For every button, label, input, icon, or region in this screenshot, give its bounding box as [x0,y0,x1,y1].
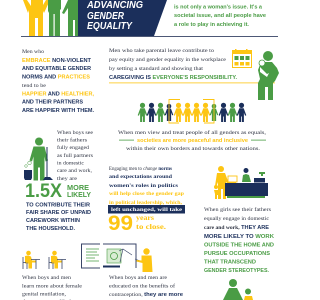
text block: fair share: TO CONTRIBUTE THEIR [26,202,90,208]
text block: boys see fathers: as full partners [57,152,93,159]
text block: girls see fathers: GENDER STEREOTYPES. [204,268,270,274]
text block: healthier men: AND EQUITABLE GENDER [22,66,91,72]
text block: parental leave: pay equity and gender equality in the workplace [109,57,227,63]
text block: healthier men: ARE HAPPIER WITH THEM. [22,108,95,114]
statistic: 99 years to close: years [136,214,154,222]
text block: girls see fathers: OUTSIDE THE HOME AND [204,242,274,248]
text block: healthier men: Men who [22,49,44,55]
text block: parental leave [109,48,275,83]
text block: boys see fathers [57,130,94,182]
text block: healthier men: NORMS AND PRACTICES [22,74,91,80]
text block: boys see fathers: in domestic [57,160,85,166]
text block: parental leave: Men who take parental leave contribute to [109,48,214,54]
text block: politics [109,166,184,206]
icon: father holding baby [258,51,279,100]
text block: contraception [109,275,183,300]
text block: contraception: contraception, they are more [109,292,183,298]
text block: girls see fathers: MORE LIKELY TO WORK [204,234,274,240]
icon: mother and child [223,279,253,300]
text block: fair share [26,202,91,232]
text block: societies: When men view and treat people of all genders as equals, [118,129,266,136]
text block: girls see fathers: PURSUE OCCUPATIONS [204,251,271,257]
text block: fair share: FAIR SHARE OF UNPAID [26,210,91,216]
text block: girls see fathers: equally engage in domestic [204,216,270,222]
people row with highlighted equal group [138,100,246,123]
text block: FGM: genital mutilation, [22,292,66,298]
icon: woman and child with shop counter [214,166,268,199]
text block: contraception: educated on the benefits of [109,282,175,290]
icon: father cleaning with mop [24,138,53,180]
title banner: EQUALITY [87,21,133,32]
callout: left unchanged [108,205,185,214]
statistic: 1.5X more likely: LIKELY [67,192,91,199]
icon: two students at desks [23,251,66,269]
text block: boys see fathers: they are [57,176,78,182]
text block: fair share: THE HOUSEHOLD. [26,226,76,232]
statistic: 99 years to close: to close. [136,223,166,231]
text block: societies: within their own borders and towards other nations. [126,146,260,152]
text block: FGM [22,275,83,300]
statistic: 99 years to close [108,212,166,235]
icon: teacher at whiteboard [82,244,152,272]
text block: boys see fathers: When boys see [57,130,94,136]
text block: societies: societies are more peaceful and inclusive [137,138,248,144]
statistic: 1.5X more likely: MORE [67,185,89,192]
text block: healthier men [22,49,95,114]
text block: politics: Engaging men to change norms [109,166,172,172]
text block: healthier men: tend to be [22,83,47,89]
intro statement: is not only a woman's issue. It's a [174,4,262,10]
title banner: GENDER [87,11,125,22]
text block: girls see fathers: When girls see their fathers [204,206,271,213]
text block: FGM: learn more about female [22,282,83,290]
intro statement [174,4,266,28]
text block: boys see fathers: fully engaged [57,144,89,151]
text block: politics: women's roles in politics [109,183,178,189]
text block: politics: will help close the gender gap [109,191,184,197]
text block: healthier men: AND THEIR PARTNERS [22,100,84,106]
text block: healthier men: EMBRACE NON-VIOLENT [22,58,92,64]
text block: girls see fathers: THAT TRANSCEND [204,260,256,266]
text block: politics: in political leadership, which, [109,200,183,206]
text block: politics: and expectations around [109,174,172,180]
intro statement: a role to play in achieving it. [174,22,250,28]
statistic: 99 years to close: 99 [108,212,133,235]
intro statement: societal issue, and all people have [174,13,266,19]
text block: boys see fathers: their fathers [57,136,87,144]
text block: contraception: When boys and men are [109,275,168,281]
title banner: ADVANCING [86,0,143,11]
text block: girls see fathers: care and work, THEY ARE [204,225,270,231]
statistic: 1.5X more likely: 1.5X [25,181,62,202]
text block: boys see fathers: care and work, [57,168,92,174]
statistic: 1.5X more likely [25,181,91,202]
text block: parental leave: CAREGIVING IS EVERYONE'S RESPONSIBILITY. [109,75,238,81]
text block: girls see fathers [204,206,274,274]
callout: left unchanged: left unchanged, will take [111,207,183,213]
text block: parental leave: by setting a standard and showing that [109,66,204,72]
text block: societies [118,129,266,152]
title banner [78,0,167,36]
illustration: three standing figures [23,0,84,36]
text block: fair share: CAREWORK WITHIN [26,218,80,224]
text block: FGM: When boys and men [22,275,71,281]
icon: calendar [232,49,252,68]
text block: healthier men: HAPPIER AND HEALTHIER, [22,92,95,98]
